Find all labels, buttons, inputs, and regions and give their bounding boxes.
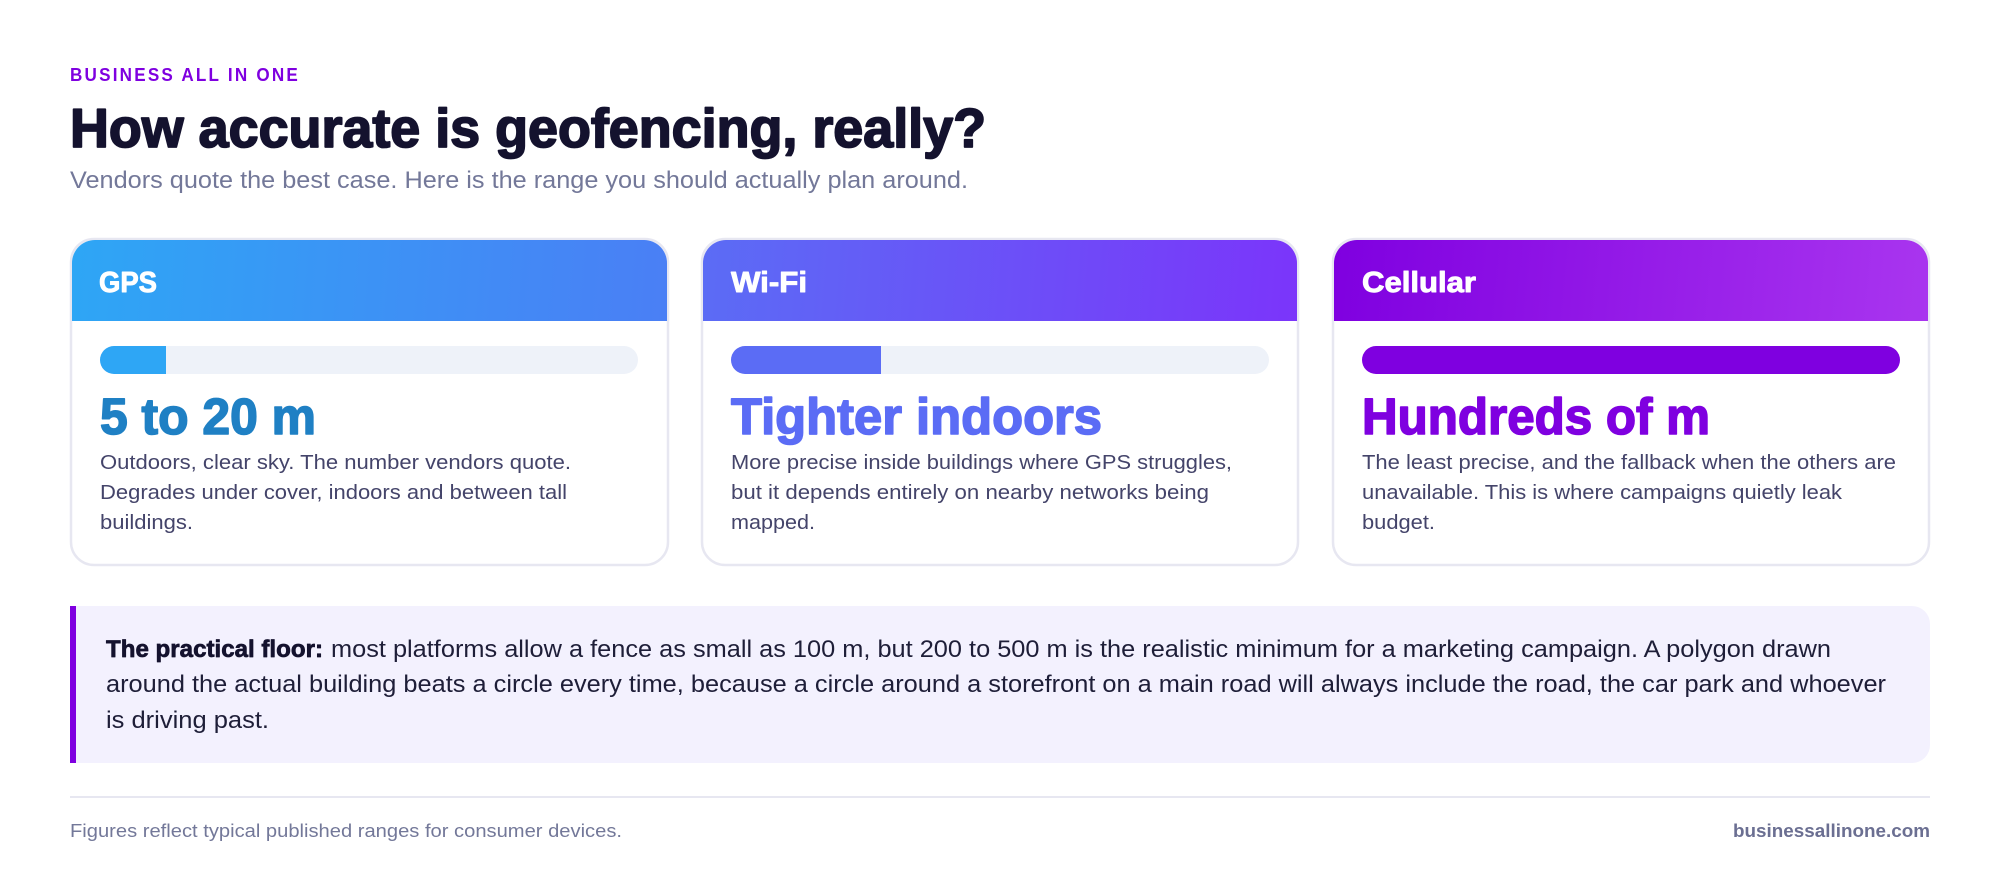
description: budget. <box>1362 512 1435 534</box>
description: unavailable. This is where campaigns quietly leak <box>1362 482 1843 504</box>
description: buildings. <box>100 512 193 534</box>
header label: Cellular <box>1362 267 1476 299</box>
callout accent bar <box>70 606 76 763</box>
description: Degrades under cover, indoors and between tall <box>100 482 567 504</box>
callout lead-in: The practical floor: <box>106 636 323 663</box>
range bar <box>100 346 638 374</box>
description: More precise inside buildings where GPS struggles, <box>731 452 1232 474</box>
card header <box>72 240 667 321</box>
footnote: Figures reflect typical published ranges for consumer devices. <box>70 820 622 841</box>
title: How accurate is geofencing, really? <box>70 97 986 159</box>
panel: GPS <box>0 0 668 565</box>
eyebrow: BUSINESS ALL IN ONE <box>70 64 300 85</box>
card header <box>1334 240 1928 321</box>
callout text: is driving past. <box>106 707 269 734</box>
header label: GPS <box>99 267 157 299</box>
panel: Cellular <box>0 0 1929 565</box>
header label: Wi-Fi <box>731 267 807 299</box>
card background <box>71 239 668 565</box>
subtitle: Vendors quote the best case. Here is the range you should actually plan around. <box>70 167 968 194</box>
callout text: most platforms allow a fence as small as 100 m, but 200 to 500 m is the realistic minimum for a marketing campaign. A polygon drawn <box>331 636 1831 663</box>
range bar <box>731 346 1269 374</box>
range bar <box>1362 346 1900 374</box>
description: mapped. <box>731 512 815 534</box>
description: but it depends entirely on nearby networks being <box>731 482 1209 504</box>
callout text: around the actual building beats a circle every time, because a circle around a storefront on a main road will always include the road, the car park and whoever <box>106 671 1886 698</box>
description: Outdoors, clear sky. The number vendors quote. <box>100 452 571 474</box>
callout background <box>70 606 1930 763</box>
description: The least precise, and the fallback when the others are <box>1362 452 1896 474</box>
card background <box>702 239 1298 565</box>
card header <box>703 240 1297 321</box>
card background <box>1333 239 1929 565</box>
accuracy value: Hundreds of m <box>1362 388 1710 445</box>
accuracy value: 5 to 20 m <box>100 388 316 445</box>
accuracy value: Tighter indoors <box>731 388 1102 445</box>
source URL: businessallinone.com <box>1733 820 1930 841</box>
panel: Wi-Fi <box>0 0 1298 565</box>
